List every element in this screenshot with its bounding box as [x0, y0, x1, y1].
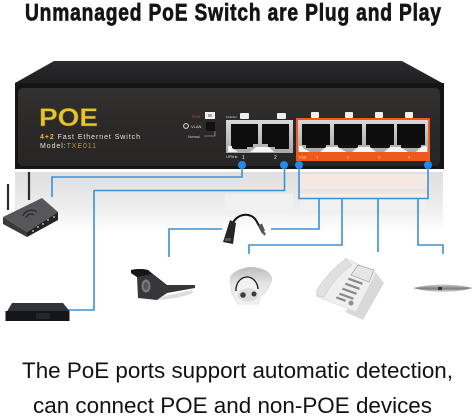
icon: wireless router	[3, 172, 58, 237]
switch type label: 4+2 Fast Ethernet Switch	[40, 134, 140, 141]
uplink ports	[226, 113, 293, 161]
POE logo: POE	[39, 104, 98, 132]
PoE ports highlighted in orange: PoE	[299, 154, 307, 160]
model label: Model:TXE011	[40, 143, 96, 150]
VLAN switch controls	[184, 112, 215, 139]
PoE switch	[15, 61, 444, 169]
caption	[22, 358, 453, 417]
VLAN switch controls: VLAN	[191, 124, 202, 129]
VLAN switch controls: PWR	[192, 115, 201, 119]
icon: wireless access point	[413, 284, 473, 292]
icon: bullet camera	[131, 269, 195, 300]
uplink ports: 1	[242, 155, 245, 161]
PoE ports highlighted in orange	[296, 112, 430, 161]
port connection dots	[238, 161, 432, 169]
icon: desk phone	[316, 258, 384, 320]
PoE ports highlighted in orange: 3	[378, 154, 381, 160]
switch faceplate	[18, 88, 440, 166]
PoE ports highlighted in orange: 2	[347, 154, 350, 160]
uplink ports: Link/Act	[226, 115, 237, 119]
icon: PoE splitter	[223, 215, 265, 244]
PoE ports highlighted in orange: 1	[316, 154, 319, 160]
PoE ports highlighted in orange: 4	[408, 154, 411, 160]
switch top panel	[15, 61, 444, 88]
VLAN switch controls: Normal	[188, 135, 200, 139]
connection lines	[52, 165, 443, 310]
caption line 1: The PoE ports support automatic detection,	[22, 358, 453, 383]
icon: dome camera	[230, 267, 272, 305]
switch front body	[15, 83, 444, 169]
uplink ports: 2	[274, 155, 277, 161]
icon: network video recorder	[6, 303, 70, 321]
uplink ports: UPlink	[226, 154, 238, 159]
switch reflection	[15, 172, 443, 232]
